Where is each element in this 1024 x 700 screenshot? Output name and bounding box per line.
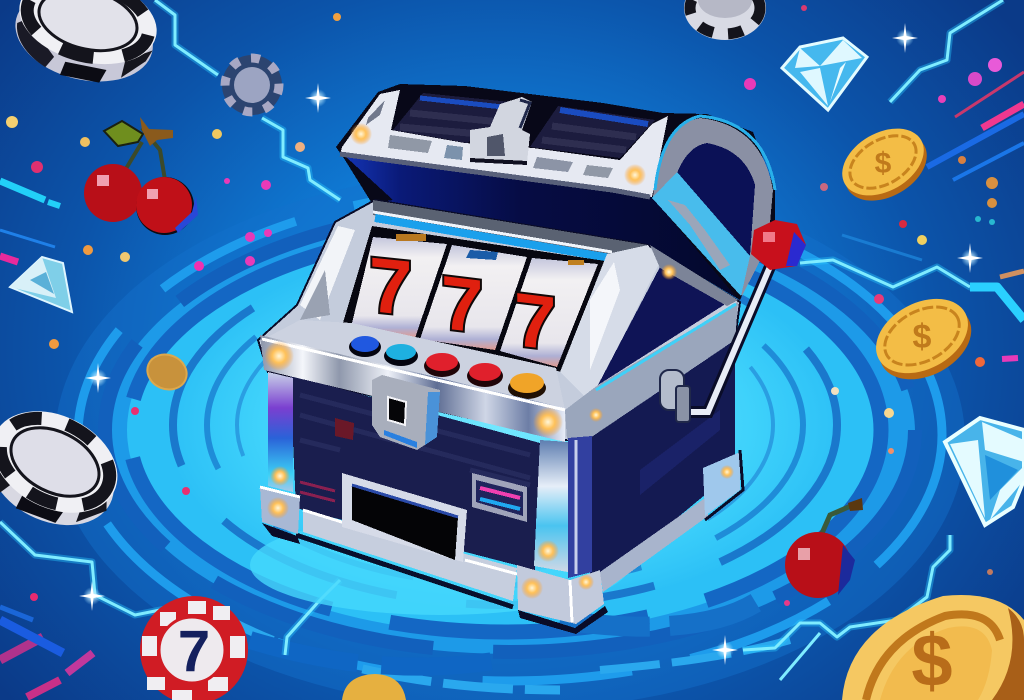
lower right band xyxy=(565,302,738,440)
right foot xyxy=(517,565,604,624)
reel sevens xyxy=(369,240,556,367)
buttons xyxy=(349,336,546,399)
front face xyxy=(290,375,540,570)
poker chip: red seven: 7 xyxy=(178,619,210,684)
poker chip: left xyxy=(0,391,136,545)
diamond: left xyxy=(10,257,72,312)
gold coin: small left xyxy=(142,349,192,395)
gold coin: right: $ xyxy=(913,318,932,356)
gold coin: bottom right xyxy=(842,595,1024,700)
bottom rail xyxy=(303,510,517,601)
lid lamps xyxy=(350,123,372,145)
reels xyxy=(352,234,598,367)
poker chip: red seven xyxy=(140,596,248,700)
reel sevens: 7 xyxy=(441,260,483,350)
right arch band xyxy=(560,245,660,402)
cherry: lower right xyxy=(785,498,863,598)
poker chip: top centre right xyxy=(684,0,766,40)
machine plate xyxy=(258,200,740,440)
chest under glow xyxy=(250,515,630,615)
gold coin: bottom xyxy=(342,674,406,700)
interior triangle xyxy=(598,267,727,385)
front band xyxy=(260,335,565,442)
lid underside xyxy=(345,156,737,298)
lid hasp xyxy=(470,97,532,163)
right back foot xyxy=(703,452,740,516)
left foot xyxy=(260,487,300,534)
gold coin: bottom right: $ xyxy=(911,619,953,700)
reel window xyxy=(342,226,612,372)
lock hasp xyxy=(372,375,440,450)
right face xyxy=(590,340,735,590)
gold coin: upper right: $ xyxy=(875,147,892,180)
slot lever xyxy=(660,220,806,422)
left post xyxy=(268,372,293,492)
corner lights xyxy=(264,264,734,599)
button plate xyxy=(262,320,565,410)
poker chip: small grey xyxy=(222,55,282,115)
coin slot xyxy=(342,473,467,562)
diamond: right xyxy=(945,418,1024,525)
swirl vortex xyxy=(55,170,965,700)
lid panel: dark stripes xyxy=(393,93,520,143)
lid band: silver xyxy=(340,90,668,197)
chest lid xyxy=(336,84,775,300)
reel sevens: 7 xyxy=(514,277,556,367)
right post xyxy=(534,440,568,572)
right rail xyxy=(600,496,708,592)
lid arch end xyxy=(653,118,773,296)
left arch shading xyxy=(300,226,355,320)
cherries: top left xyxy=(84,117,198,235)
lower swirl bands xyxy=(210,610,560,690)
display xyxy=(472,473,527,522)
diamond: top right xyxy=(782,38,867,110)
treasure chest xyxy=(258,84,775,634)
gold coin: right xyxy=(863,284,984,394)
poker chip: top left xyxy=(6,0,166,95)
gold coin: upper right xyxy=(830,115,939,214)
reel sevens: 7 xyxy=(369,240,412,333)
